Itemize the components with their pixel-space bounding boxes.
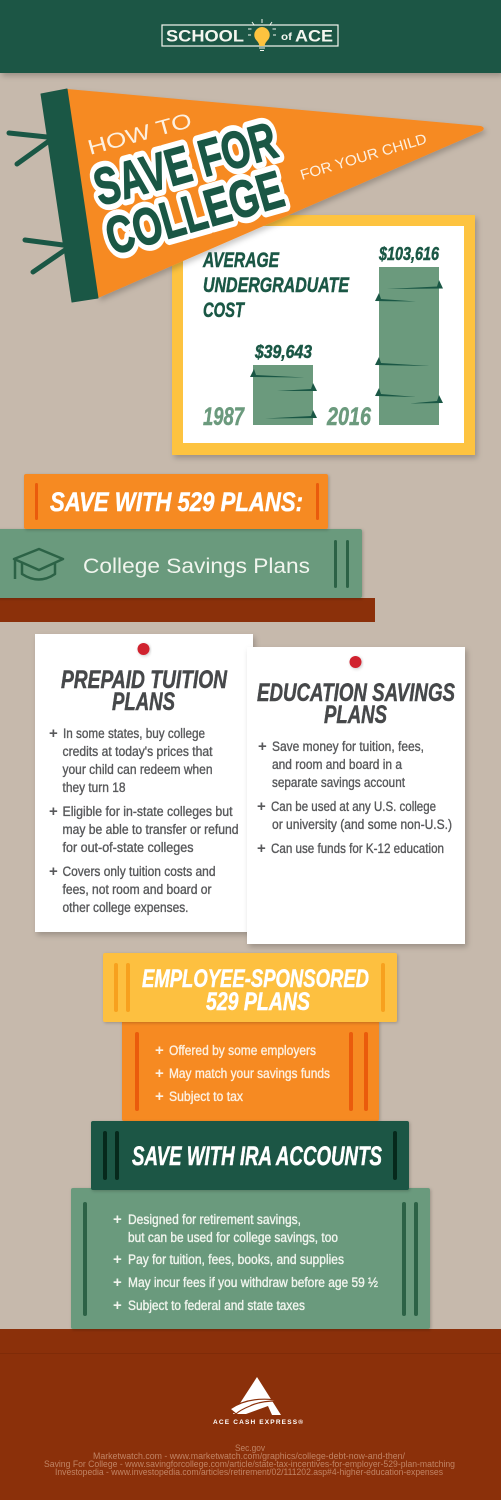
pennant ties [9,133,65,272]
bullet list: Can be used at any U.S. college [271,799,436,814]
bar: 1987: $39,643 [254,342,312,362]
bullet list: + [113,1251,122,1268]
book: college savings plans: College Savings Plans [83,555,310,578]
panel: average undergraduate cost [172,215,475,455]
book: employee-sponsored details [122,1020,379,1121]
pennant stripe [41,89,98,302]
pennant title: FOR YOUR CHILD [299,131,429,184]
book: save with IRA accounts: SAVE WITH IRA ACCOUNTS [132,1141,382,1171]
bar: 2016: $103,616 [378,244,440,264]
pin [138,643,150,655]
pennant title [85,109,429,267]
pennant title: SAVE FOR [88,112,283,218]
bullet list: but can be used for college savings, too [128,1230,338,1245]
bullet list: + [257,840,266,857]
bullet list: they turn 18 [62,780,126,795]
pennant title: COLLEGE [99,161,290,267]
bullet list [113,1211,378,1314]
bar: 1987: 1987 [203,403,245,431]
sources [44,1443,455,1477]
pennant title: SAVE FOR [88,112,283,218]
bullet list: Offered by some employers [169,1043,316,1058]
sources: Investopedia - www.investopedia.com/articles/retirement/02/111202.asp#4-higher-education-expenses [55,1467,443,1477]
bullet list: Subject to federal and state taxes [128,1298,305,1313]
heading [257,679,455,729]
logo: School of ACE: of [281,31,293,43]
bullet list [155,1042,330,1105]
bullet list: + [155,1065,164,1082]
sources: Saving For College - www.savingforcollege.com/article/state-tax-incentives-for-employer-529-plan-matching [44,1459,455,1469]
panel: education savings plans [247,647,465,944]
bullet list: Save money for tuition, fees, [272,739,424,754]
bullet list: Subject to tax [169,1089,243,1104]
chart heading: COST [203,299,246,322]
bullet list: credits at today's prices that [62,744,213,759]
pennant body [67,89,484,298]
book: employee-sponsored 529 plans: EMPLOYEE-SPONSORED [142,965,369,993]
footer [0,1329,501,1500]
panel: prepaid tuition plans [35,634,253,932]
bar: 2016: 2016 [326,403,372,431]
bullet list: May incur fees if you withdraw before age 59 ½ [128,1275,378,1290]
book: college savings plans [0,529,362,598]
heading: PLANS [324,701,387,729]
bullet list: Covers only tuition costs and [62,864,216,879]
bullet list: for out-of-state colleges [62,840,194,855]
pennant [9,89,484,302]
pennant title: COLLEGE [99,161,290,267]
bullet list: Pay for tuition, fees, books, and supplies [128,1252,344,1267]
bullet list: + [113,1297,122,1314]
heading: PLANS [112,688,175,716]
bullet list: + [113,1211,122,1228]
bullet list: + [258,738,267,755]
icon: graduation cap [14,549,63,580]
book: save with 529 plans: SAVE WITH 529 PLANS: [50,487,303,517]
book: employee-sponsored 529 plans: 529 PLANS [206,988,310,1016]
bullet list: In some states, buy college [63,726,205,741]
book: save with IRA accounts [91,1121,409,1190]
bullet list: + [49,803,58,820]
logo: School of ACE: ACE [295,26,333,46]
book: save with 529 plans [24,474,328,529]
bullet list: may be able to transfer or refund [62,822,238,837]
heading [61,666,228,716]
bullet list: + [113,1274,122,1291]
bullet list: other college expenses. [62,900,188,915]
bullet list: Eligible for in-state colleges but [62,804,233,819]
bullet list: + [49,863,58,880]
bullet list: and room and board in a [272,757,402,772]
logo: ACE Cash Express: ACE CASH EXPRESS® [213,1418,303,1426]
pennant title: HOW TO [85,109,194,160]
shelf: brown [0,598,375,622]
chart heading: UNDERGRADUATE [203,274,350,297]
bullet list: + [49,725,58,742]
bar: 1987 [203,342,317,431]
heading: PREPAID TUITION [61,666,228,694]
header band [0,0,501,73]
book: employee-sponsored 529 plans [103,953,397,1022]
pin [350,656,362,668]
sources: Sec.gov [235,1443,265,1453]
bullet list: May match your savings funds [169,1066,330,1081]
bullet list: + [257,798,266,815]
chart heading: AVERAGE [202,249,280,272]
logo: School of ACE: SCHOOL [166,26,244,46]
bullet list: separate savings account [272,775,405,790]
bullet list: Designed for retirement savings, [128,1212,301,1227]
bullet list: or university (and some non-U.S.) [272,817,452,832]
bullet list: Can use funds for K-12 education [271,841,444,856]
bullet list: fees, not room and board or [62,882,212,897]
sources: Marketwatch.com - www.marketwatch.com/graphics/college-debt-now-and-then/ [93,1451,405,1461]
bullet list: your child can redeem when [62,762,212,777]
logo: School of ACE [162,19,338,50]
bullet list [49,725,238,915]
bar: 2016 [326,244,443,431]
chart heading [202,249,350,322]
bullet list [257,738,452,857]
logo: ACE Cash Express [213,1377,303,1426]
bullet list: + [155,1042,164,1059]
bullet list: + [155,1088,164,1105]
book: IRA details [71,1188,430,1329]
